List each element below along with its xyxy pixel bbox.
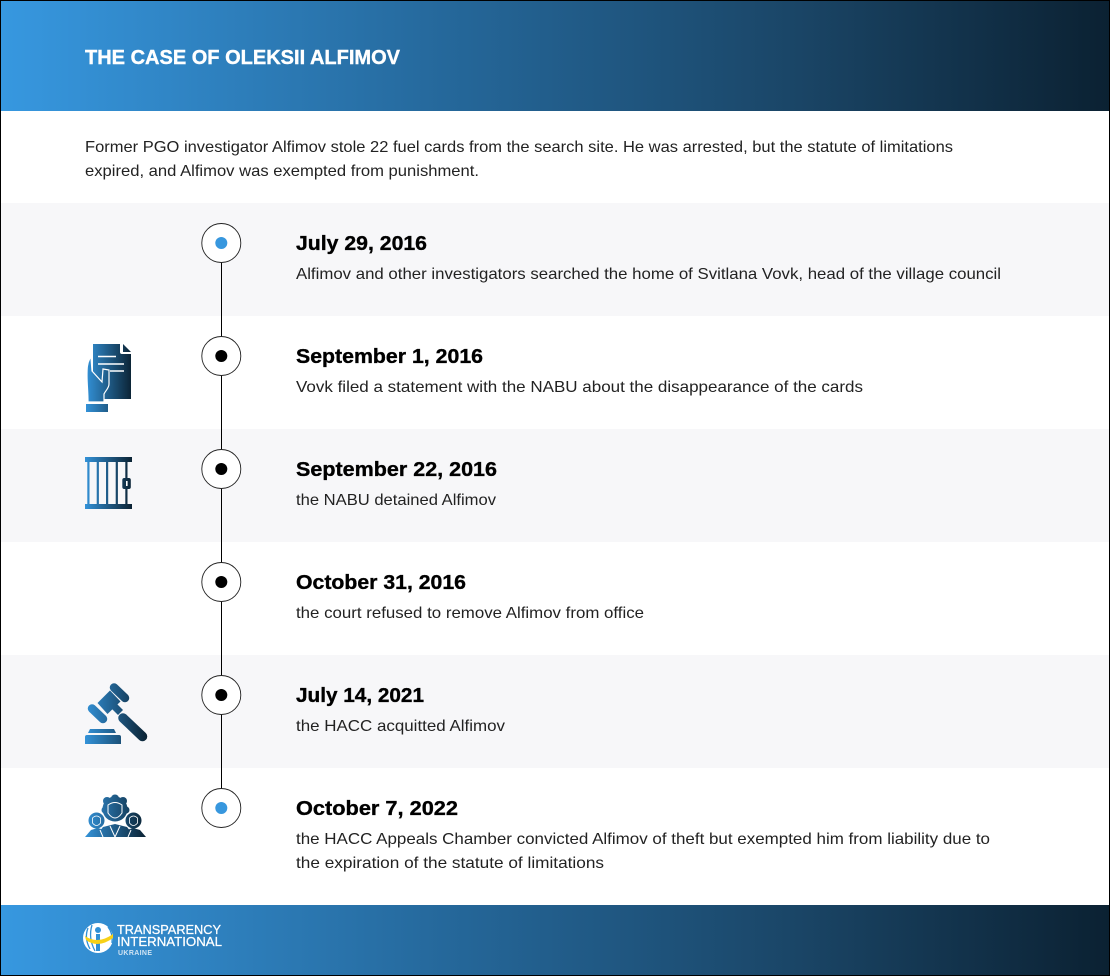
band: row 5 background — [0, 655, 1110, 768]
header banner — [0, 0, 1110, 111]
icon: gavel — [85, 688, 142, 744]
logo — [83, 922, 222, 957]
event 3: September 22, 2016 — [296, 459, 497, 481]
event 1: July 29, 2016 — [296, 233, 427, 255]
timeline marker 1 — [202, 224, 241, 262]
event 3 — [296, 459, 497, 509]
event 5: the HACC acquitted Alfimov — [296, 718, 505, 735]
timeline marker 6 — [202, 788, 241, 828]
event 1 — [296, 233, 1001, 283]
logo text: UKRAINE — [118, 950, 152, 957]
event 4 — [296, 572, 644, 622]
event 6: the expiration of the statute of limitations — [296, 855, 604, 872]
event 5: July 14, 2021 — [296, 685, 424, 707]
icon: group of judges — [85, 794, 146, 837]
timeline line — [221, 243, 222, 808]
intro text: expired, and Alfimov was exempted from punishment. — [85, 163, 479, 180]
logo text — [117, 922, 222, 957]
event 5 — [296, 685, 505, 735]
event 4: October 31, 2016 — [296, 572, 466, 594]
timeline marker 3 — [202, 450, 241, 488]
event 2: September 1, 2016 — [296, 346, 483, 368]
band: row 1 background — [0, 203, 1110, 316]
timeline marker 4 — [202, 562, 241, 602]
intro text: Former PGO investigator Alfimov stole 22 fuel cards from the search site. He was arrested, but the statute of limitations — [85, 139, 953, 156]
timeline marker 2 — [202, 336, 241, 376]
event 1: Alfimov and other investigators searched the home of Svitlana Vovk, head of the village council — [296, 266, 1001, 283]
event 2: Vovk filed a statement with the NABU about the disappearance of the cards — [296, 379, 863, 396]
intro text — [85, 139, 953, 180]
event 6: the HACC Appeals Chamber convicted Alfimov of theft but exempted him from liability due to — [296, 831, 990, 848]
icon: document in hand — [86, 344, 131, 412]
title: THE CASE OF OLEKSII ALFIMOV — [85, 46, 400, 69]
logo text: INTERNATIONAL — [117, 934, 222, 949]
logo mark — [83, 923, 113, 953]
timeline marker 5 — [202, 676, 241, 714]
event 6 — [296, 798, 990, 872]
logo text: TRANSPARENCY — [117, 922, 221, 937]
icon: prison bars — [85, 457, 132, 509]
event 3: the NABU detained Alfimov — [296, 492, 496, 509]
event 2 — [296, 346, 863, 396]
band: row 3 background — [0, 429, 1110, 542]
event 4: the court refused to remove Alfimov from office — [296, 605, 644, 622]
footer banner — [0, 905, 1110, 976]
event 6: October 7, 2022 — [296, 798, 458, 820]
